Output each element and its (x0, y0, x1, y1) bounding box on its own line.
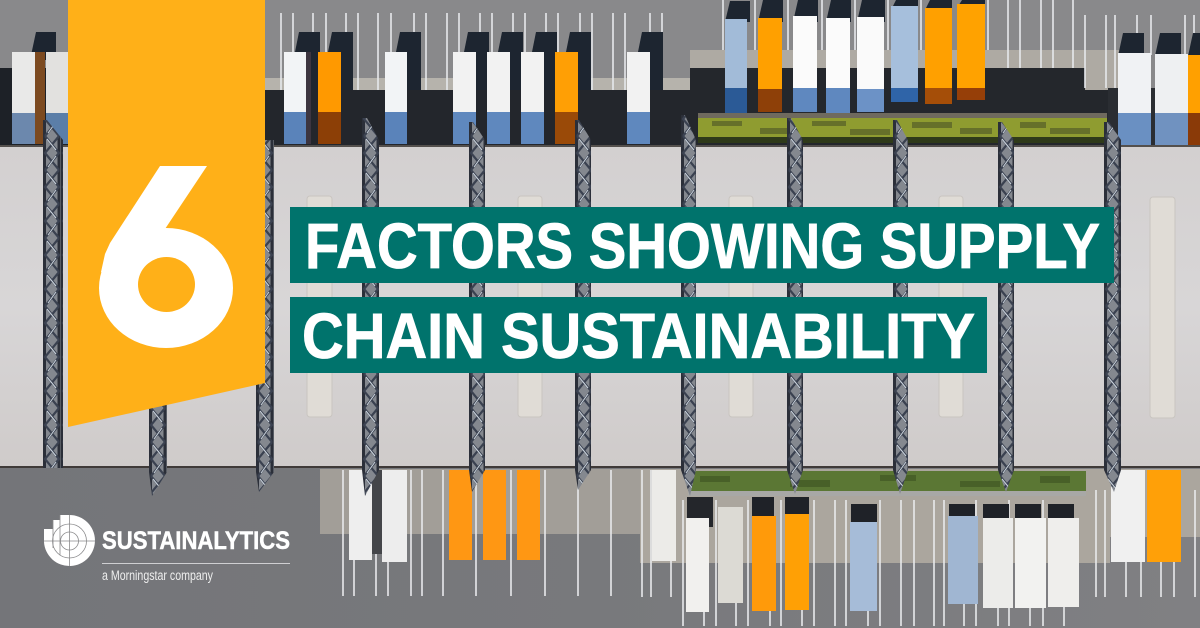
parking lines, bottom (343, 470, 1195, 626)
logo tagline: a Morningstar company (102, 568, 213, 583)
logo: Sustainalytics (44, 515, 290, 583)
trailers, bottom row (349, 470, 1181, 612)
logo mark (44, 515, 95, 566)
steel trusses (43, 115, 1121, 496)
green roof strip, bottom (688, 471, 1086, 496)
roof skylights (307, 196, 1175, 418)
parking lines, top (281, 0, 1194, 90)
top asphalt yard (0, 0, 1200, 146)
headline line 1: FACTORS SHOWING SUPPLY (305, 210, 1100, 282)
big number 6 (99, 166, 233, 348)
logo wordmark: SUSTAINALYTICS (102, 527, 290, 555)
green roof strip, top (698, 113, 1107, 143)
orange banner (68, 0, 265, 427)
warehouse roof (0, 145, 1200, 468)
trailers, top row (12, 4, 1200, 145)
big number 6: 6 (96, 138, 236, 391)
trailer shadows, top (30, 0, 1200, 90)
bottom asphalt yard (0, 468, 1200, 628)
headline line 2: CHAIN SUSTAINABILITY (302, 300, 975, 372)
